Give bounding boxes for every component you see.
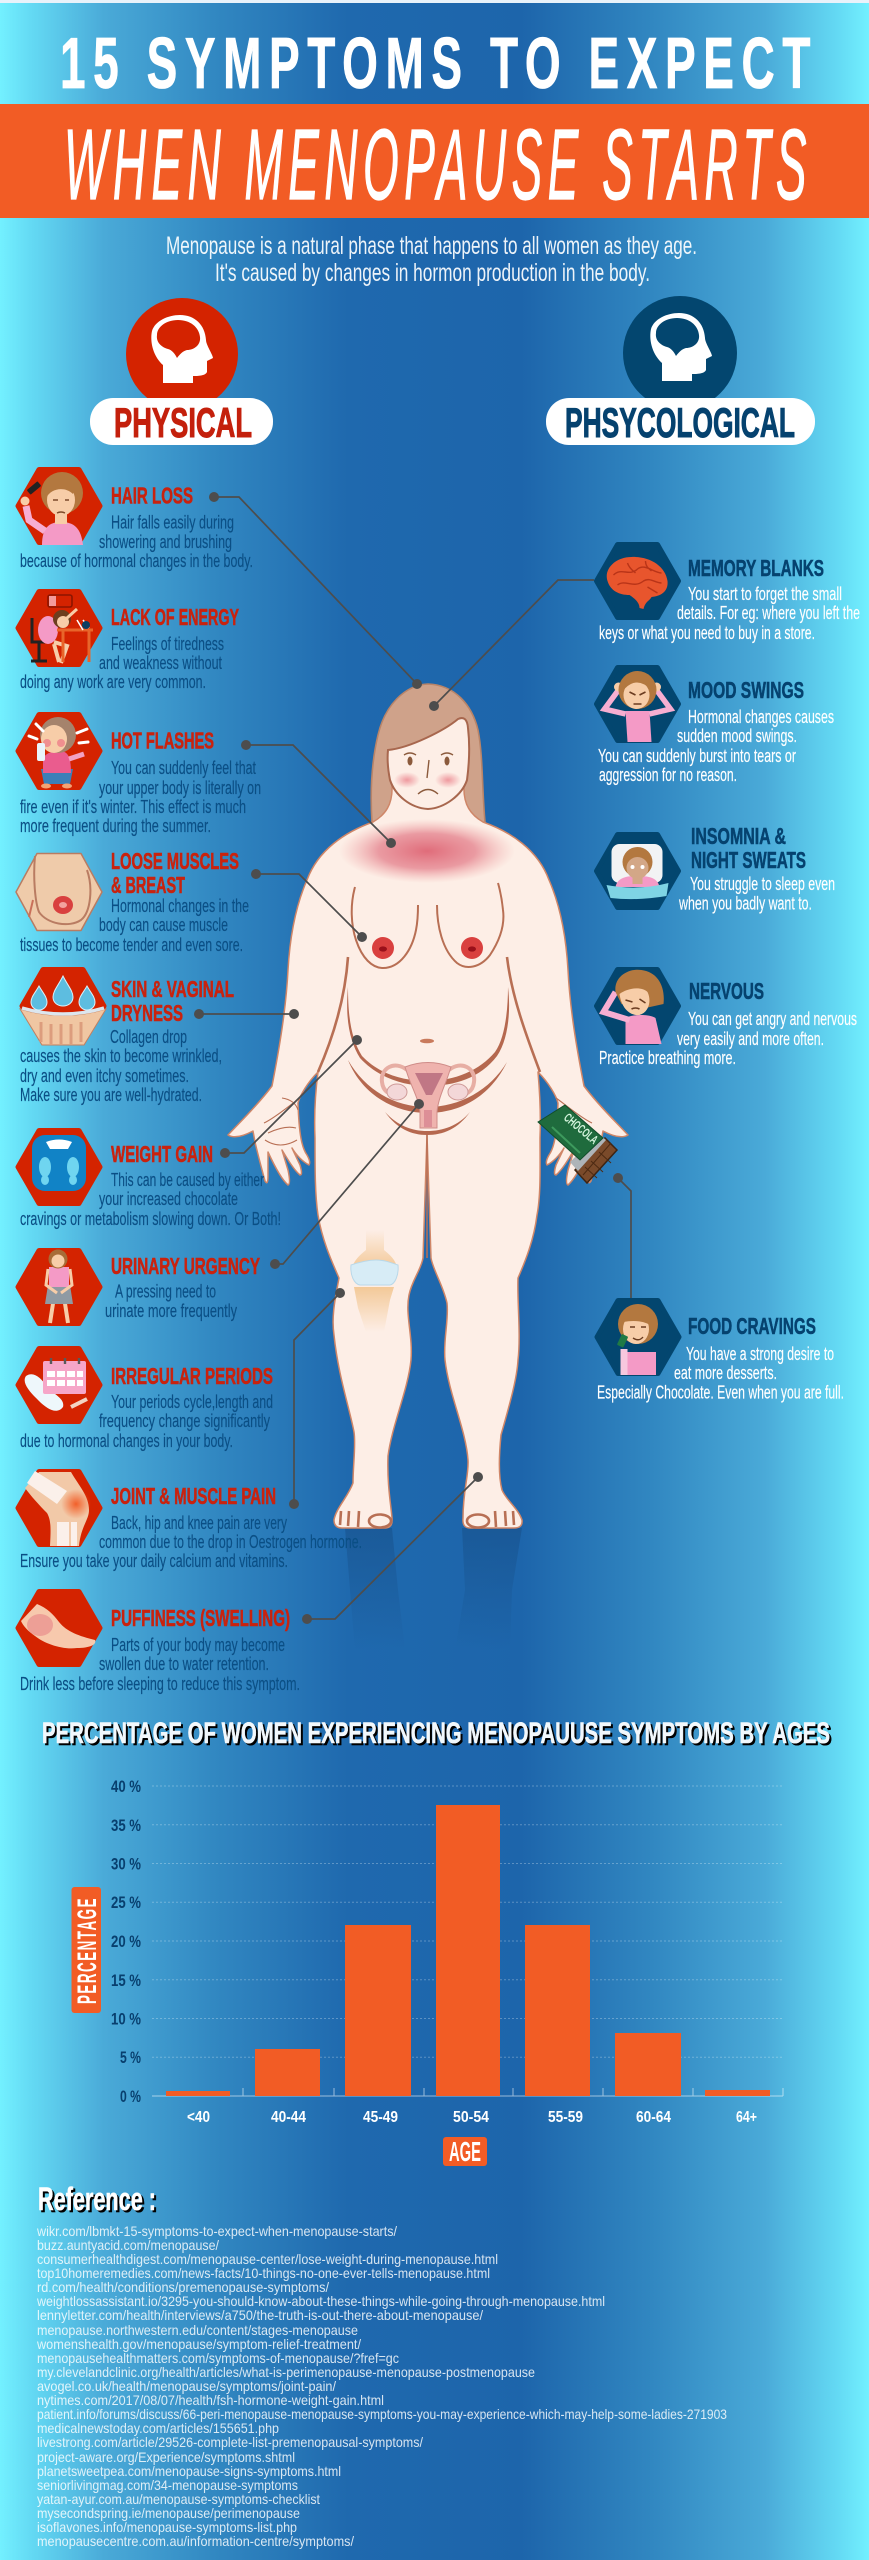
chocolate bar: CHOCOLA	[561, 1111, 601, 1147]
icon: woman holding bladder	[18, 1250, 100, 1324]
icon: woman brushing hair	[18, 470, 100, 545]
toes	[340, 1511, 514, 1528]
description	[678, 873, 835, 914]
heading: & BREAST	[111, 872, 185, 898]
reference list: planetsweetpea.com/menopause-signs-symptoms.html	[37, 2463, 341, 2479]
description: Parts of your body may become	[111, 1634, 285, 1655]
description	[20, 895, 249, 955]
icon: exhausted woman at desk	[18, 592, 100, 664]
category badge: physical	[90, 298, 273, 446]
panel: hair loss	[18, 470, 253, 571]
x-axis labels: 60-64	[636, 2109, 671, 2126]
description	[597, 1343, 844, 1402]
heading: NERVOUS	[689, 978, 764, 1004]
description	[20, 1026, 222, 1105]
body figure	[228, 684, 628, 1650]
heading: HAIR LOSS	[111, 482, 193, 508]
heading: IRREGULAR PERIODS	[111, 1363, 273, 1389]
category badge: psychological	[546, 296, 815, 446]
icon: swollen foot	[18, 1592, 100, 1664]
skin silhouette	[228, 785, 628, 1528]
heading: LOOSE MUSCLES	[111, 848, 239, 874]
reference list: avogel.co.uk/health/menopause/symptoms/joint-pain/	[37, 2378, 336, 2394]
reference list: wikr.com/lbmkt-15-symptoms-to-expect-when-menopause-starts/	[36, 2223, 397, 2239]
description: Hair falls easily during	[111, 512, 234, 532]
description: frequency change significantly	[99, 1410, 271, 1431]
description	[20, 1512, 362, 1571]
panel: mood swings	[596, 668, 834, 785]
description: This can be caused by either	[111, 1169, 264, 1190]
description: dry and even itchy sometimes.	[20, 1065, 189, 1086]
reference list: menopausehealthmatters.com/symptoms-of-menopause/?fref=gc	[37, 2350, 399, 2366]
reference list: rd.com/health/conditions/premenopause-symptoms/	[37, 2279, 329, 2295]
arrow: skin dryness	[194, 1009, 299, 1019]
hot flash glow	[339, 819, 515, 883]
reference list: mysecondspring.ie/menopause/perimenopause	[37, 2505, 300, 2521]
description	[20, 512, 253, 571]
description: Drink less before sleeping to reduce this symptom.	[20, 1673, 300, 1694]
reference list: menopause.northwestern.edu/content/stages-menopause	[37, 2322, 358, 2338]
reference list: livestrong.com/article/29526-complete-list-premenopausal-symptoms/	[37, 2434, 423, 2450]
intro text: It's caused by changes in hormon production in the body.	[215, 259, 650, 287]
panel: loose muscles and breast	[16, 848, 249, 955]
description: causes the skin to become wrinkled,	[20, 1045, 222, 1066]
heading: SKIN & VAGINAL	[111, 976, 234, 1002]
icon: head with brain	[650, 313, 712, 381]
description: sudden mood swings.	[677, 725, 797, 746]
y-axis labels: 35 %	[111, 1817, 141, 1835]
reference list: project-aware.org/Experience/symptoms.shtml	[37, 2449, 295, 2465]
description: Back, hip and knee pain are very	[111, 1512, 287, 1533]
description: Practice breathing more.	[599, 1047, 736, 1068]
icon: woman awake in bed	[596, 834, 678, 908]
reference list: seniorlivingmag.com/34-menopause-symptoms	[37, 2477, 298, 2493]
arrow: joint pain	[289, 1288, 345, 1509]
description	[599, 583, 860, 643]
reference heading: Reference :	[38, 2181, 156, 2217]
icon: brain	[596, 544, 678, 618]
icon: stressed woman	[596, 970, 678, 1044]
reference list: buzz.auntyacid.com/menopause/	[37, 2237, 219, 2253]
y-axis labels: 20 %	[111, 1933, 141, 1951]
chest creases	[264, 883, 592, 1258]
chocolate bar	[538, 1105, 617, 1183]
description	[20, 1391, 273, 1451]
heading: NIGHT SWEATS	[691, 847, 806, 873]
reference list: medicalnewstoday.com/articles/155651.php	[37, 2420, 279, 2436]
y-axis labels: 0 %	[120, 2088, 141, 2106]
x-axis labels: 55-59	[548, 2109, 583, 2126]
icon: breast close-up	[16, 854, 102, 930]
y-axis labels: 5 %	[120, 2049, 141, 2067]
navel	[420, 1039, 434, 1043]
reference list: my.clevelandclinic.org/health/articles/what-is-perimenopause-menopause-postmenopause	[37, 2364, 535, 2380]
description: Make sure you are well-hydrated.	[20, 1084, 202, 1105]
description: common due to the drop in Oestrogen hormone.	[99, 1531, 362, 1552]
icon: angry woman	[596, 668, 678, 742]
arrow: hot flashes	[241, 740, 396, 848]
description: You can suddenly feel that	[111, 757, 256, 778]
arrow: loose muscles	[251, 869, 367, 942]
description: Collagen drop	[110, 1026, 187, 1047]
panel: skin and vaginal dryness	[20, 970, 234, 1105]
x-axis labels: 50-54	[453, 2109, 489, 2126]
bar chart	[72, 1778, 783, 2167]
heading: PUFFINESS (SWELLING)	[111, 1605, 290, 1631]
reference list: isoflavones.info/menopause-symptoms-list.php	[37, 2519, 297, 2535]
panel: lack of energy	[18, 592, 239, 692]
title	[0, 23, 869, 221]
uterus	[382, 1062, 474, 1128]
description: because of hormonal changes in the body.	[20, 550, 253, 571]
description: Ensure you take your daily calcium and vitamins.	[20, 1550, 288, 1571]
heading: URINARY URGENCY	[111, 1253, 260, 1279]
arrow: urinary urgency	[270, 1099, 424, 1269]
description: and weakness without	[99, 652, 222, 673]
y-axis labels: 40 %	[111, 1778, 141, 1796]
panel: nervous	[596, 970, 857, 1068]
y-axis labels: 25 %	[111, 1894, 141, 1912]
panel: urinary urgency	[18, 1250, 260, 1324]
heading	[111, 848, 239, 898]
face	[388, 718, 469, 809]
description: showering and brushing	[99, 531, 232, 552]
heading: WEIGHT GAIN	[111, 1141, 213, 1167]
reference list: lennyletter.com/health/interviews/a750/the-truth-is-out-there-about-menopause/	[37, 2307, 483, 2323]
heading: LACK OF ENERGY	[111, 604, 239, 630]
icon: bathroom scale	[18, 1130, 100, 1204]
description	[20, 633, 224, 692]
reference list: patient.info/forums/discuss/66-peri-menopause-menopause-symptoms-you-may-experience-which-may-help-some-ladies-271903	[37, 2406, 727, 2422]
y-axis labels: 15 %	[111, 1972, 141, 1990]
y-axis title: PERCENTAGE	[72, 1897, 102, 2004]
reference list: consumerhealthdigest.com/menopause-center/lose-weight-during-menopause.html	[37, 2251, 498, 2267]
y-axis labels	[111, 1778, 141, 2106]
heading: HOT FLASHES	[111, 728, 214, 754]
description: doing any work are very common.	[20, 671, 206, 692]
icon: head with brain	[151, 315, 213, 383]
description: your upper body is literally on	[99, 777, 261, 798]
heading: JOINT & MUSCLE PAIN	[111, 1483, 276, 1509]
description: body can cause muscle	[99, 914, 228, 935]
description	[20, 757, 261, 836]
description: A pressing need to	[115, 1280, 216, 1302]
intro text	[166, 232, 697, 287]
arrow: puffiness	[302, 1472, 483, 1624]
description: due to hormonal changes in your body.	[20, 1430, 233, 1451]
panel: hot flashes	[18, 714, 261, 836]
description: aggression for no reason.	[599, 764, 737, 785]
arrow: weight gain	[220, 1035, 362, 1158]
heading: INSOMNIA &	[691, 823, 786, 849]
description	[105, 1280, 238, 1321]
panel: food cravings	[597, 1300, 844, 1402]
x-axis labels: 40-44	[271, 2109, 306, 2126]
x-axis labels: 45-49	[363, 2109, 398, 2126]
reference list: nytimes.com/2017/08/07/health/fsh-hormone-weight-gain.html	[37, 2392, 384, 2408]
panel: irregular periods	[18, 1348, 273, 1451]
panel: weight gain	[18, 1130, 281, 1229]
icon: water drops over skin	[20, 970, 106, 1045]
heading	[691, 823, 806, 873]
knee joint	[351, 1230, 398, 1332]
description: Your periods cycle,length and	[111, 1391, 273, 1412]
panel: joint and muscle pain	[18, 1471, 362, 1571]
reference list	[36, 2223, 727, 2549]
description: urinate more frequently	[105, 1300, 238, 1321]
description: cravings or metabolism slowing down. Or Both!	[20, 1208, 281, 1229]
bars	[166, 1805, 770, 2096]
icon: calendar and pad	[18, 1348, 100, 1422]
description	[599, 1008, 857, 1068]
y-axis labels: 10 %	[111, 2010, 141, 2028]
panel: memory blanks	[596, 544, 860, 643]
reference list: top10homeremedies.com/news-facts/10-things-no-one-ever-tells-menopause.html	[37, 2265, 490, 2281]
title banner	[0, 104, 869, 218]
hair	[371, 684, 485, 830]
description: Feelings of tiredness	[111, 633, 224, 654]
arrow: hair loss	[209, 492, 422, 689]
reference list: weightlossassistant.io/3295-you-should-know-about-these-things-while-going-through-menopause.html	[36, 2293, 605, 2309]
nipples	[372, 937, 483, 959]
arrow: food cravings	[613, 1173, 631, 1298]
x-axis labels: <40	[187, 2109, 210, 2126]
panel: insomnia and night sweats	[596, 823, 835, 914]
panel: puffiness	[18, 1592, 300, 1694]
description	[20, 1634, 300, 1694]
description: Hormonal changes in the	[111, 895, 249, 916]
description: your increased chocolate	[99, 1188, 238, 1209]
description: more frequent during the summer.	[20, 815, 211, 836]
feet reflection	[345, 1528, 522, 1650]
icon: painful knee	[18, 1471, 100, 1546]
category badge: physical: PHYSICAL	[114, 399, 252, 446]
icon: woman eating chocolate	[597, 1300, 679, 1375]
heading	[111, 976, 234, 1026]
belly and hip folds	[347, 987, 509, 1135]
description: eat more desserts.	[674, 1362, 777, 1383]
leader lines	[194, 492, 631, 1624]
description: tissues to become tender and even sore.	[20, 934, 243, 955]
description	[20, 1169, 281, 1229]
x-axis title: AGE	[449, 2136, 481, 2167]
icon: sweating woman	[18, 714, 100, 788]
y-axis labels: 30 %	[111, 1856, 141, 1874]
description: swollen due to water retention.	[99, 1653, 269, 1674]
reference list: menopausecentre.com.au/information-centre/symptoms/	[37, 2533, 354, 2549]
reference list: womenshealth.gov/menopause/symptom-relief-treatment/	[36, 2336, 361, 2352]
description: fire even if it's winter. This effect is much	[20, 796, 246, 817]
x-axis title	[443, 2136, 487, 2167]
grid lines	[152, 1786, 783, 2057]
reference list: yatan-ayur.com.au/menopause-symptoms-checklist	[37, 2491, 320, 2507]
heading: DRYNESS	[111, 1000, 183, 1026]
y-axis title	[72, 1887, 102, 2013]
x-axis labels	[187, 2109, 757, 2126]
description	[598, 706, 834, 785]
heading: MOOD SWINGS	[688, 677, 804, 703]
arrow: memory blanks	[429, 580, 594, 711]
x-axis labels: 64+	[736, 2109, 757, 2126]
